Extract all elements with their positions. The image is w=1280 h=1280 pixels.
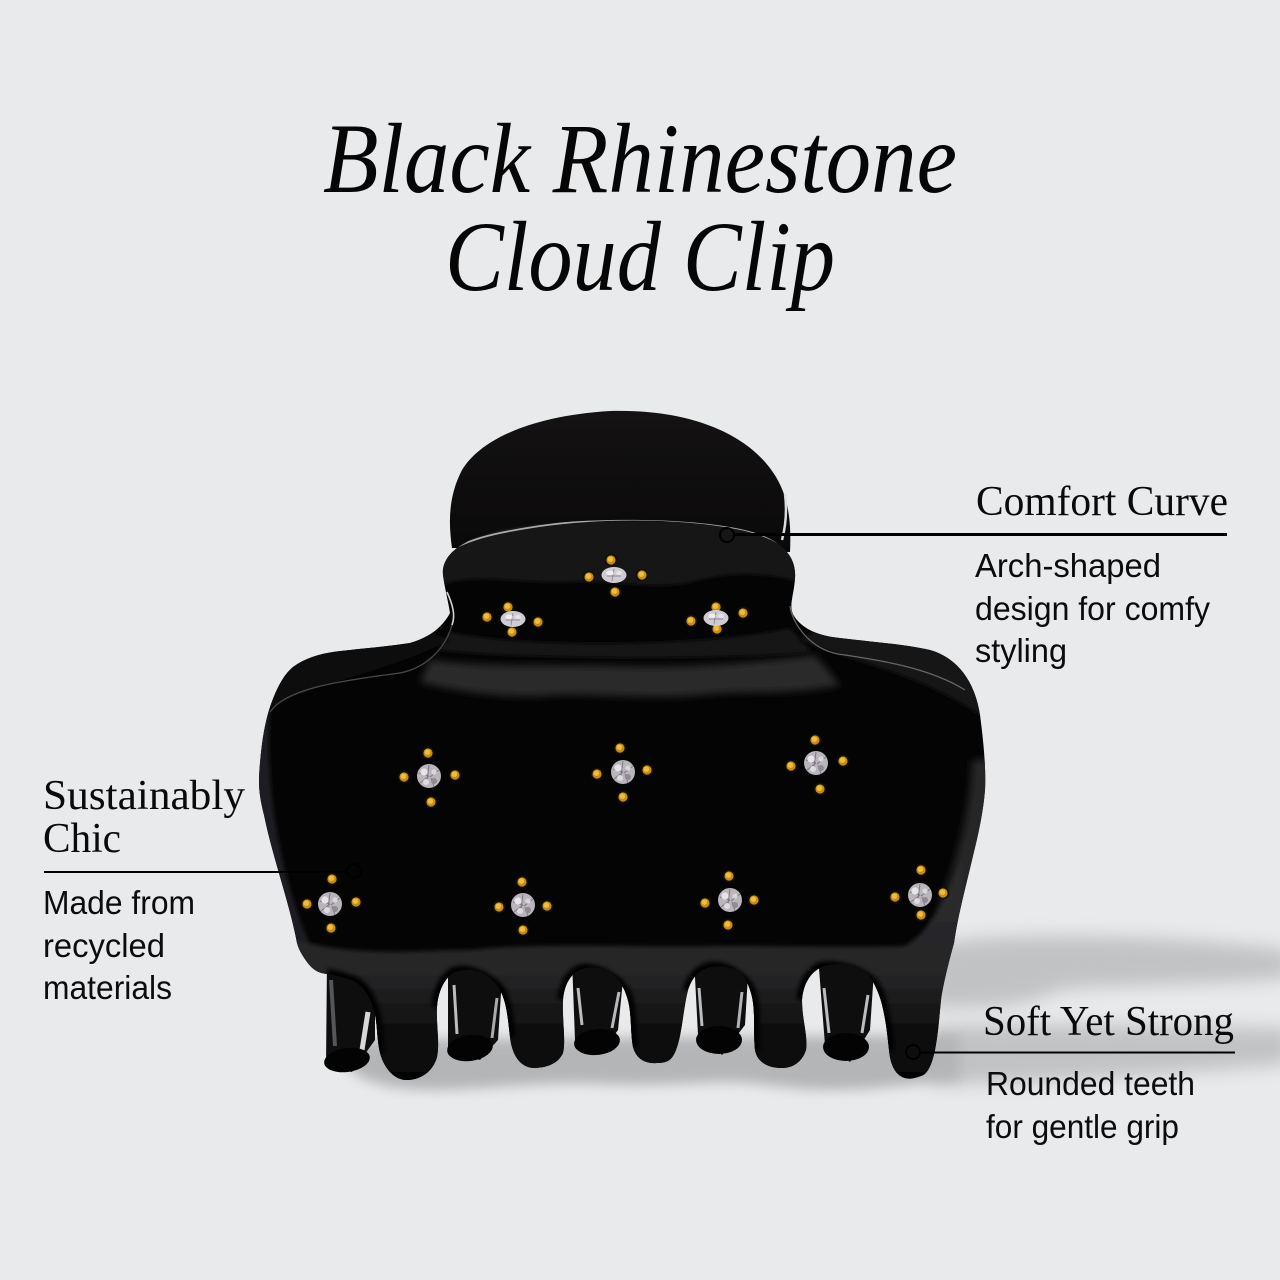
neck lower gloss and shoulders (420, 655, 840, 697)
pin 5 (818, 956, 875, 1062)
pin 3 (572, 960, 625, 1057)
callout: Comfort Curve: Comfort Curve (976, 479, 1228, 525)
clip pins (teeth behind body) (323, 956, 875, 1075)
callout: Soft Yet Strong (906, 999, 1235, 1145)
callout: Sustainably Chic: Sustainably (43, 773, 245, 819)
lower gray band (296, 896, 964, 1080)
clip front body (250, 510, 1000, 1090)
callout: Soft Yet Strong: Rounded teeth (986, 1065, 1195, 1102)
callout: Sustainably Chic (43, 773, 361, 1006)
callout: Soft Yet Strong: for gentle grip (986, 1108, 1179, 1145)
callout: Comfort Curve: styling (975, 632, 1067, 669)
title (323, 103, 957, 312)
callout: Sustainably Chic: materials (43, 969, 172, 1006)
title: Cloud Clip (445, 201, 835, 312)
pin 2 (445, 962, 503, 1064)
callout: Comfort Curve: Arch-shaped (975, 547, 1161, 584)
callout: Sustainably Chic: Chic (43, 816, 121, 862)
cast shadow of the clip (350, 936, 1280, 1090)
shoulder lip highlights (270, 625, 452, 712)
callout: Sustainably Chic: recycled (43, 927, 165, 964)
pin 1 (323, 960, 375, 1075)
clip back plate (450, 411, 790, 552)
lower row clusters (301, 873, 362, 934)
neck gloss (440, 520, 800, 586)
callout: Soft Yet Strong: Soft Yet Strong (983, 999, 1234, 1045)
gap inner shadow (327, 966, 889, 1053)
rhinestone clusters (301, 554, 949, 936)
edge sheen (259, 710, 310, 954)
callout: Sustainably Chic: Made from (43, 884, 195, 921)
callout: Comfort Curve (720, 479, 1228, 669)
callout: Comfort Curve: design for comfy (975, 590, 1210, 627)
neck clusters (583, 554, 648, 598)
pin 4 (694, 958, 749, 1055)
neck rim highlight (457, 520, 779, 548)
upper row clusters (398, 747, 461, 808)
title: Black Rhinestone (323, 103, 957, 214)
